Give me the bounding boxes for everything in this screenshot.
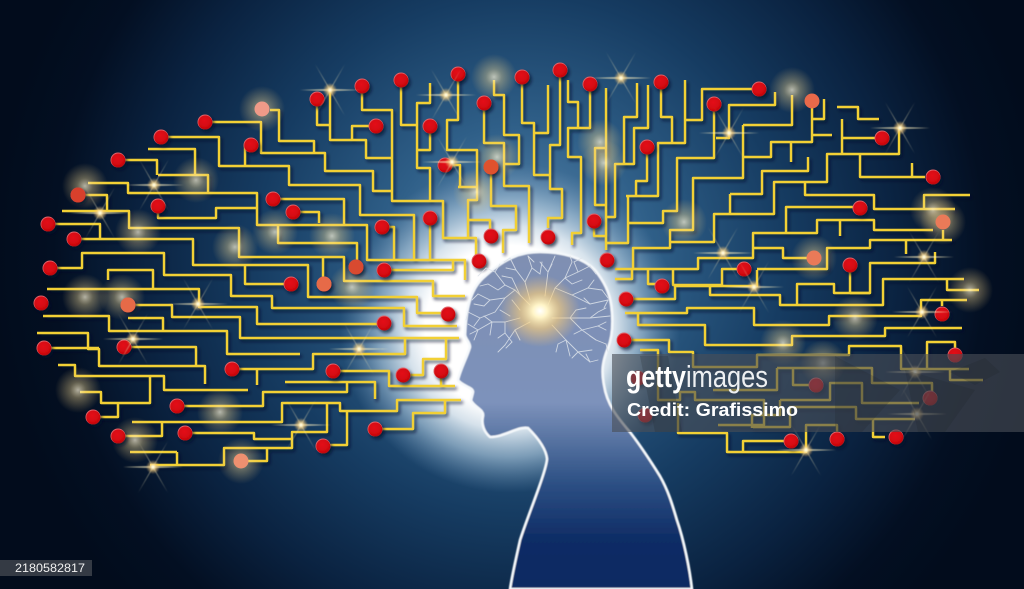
- brain core glow: [500, 275, 580, 347]
- circuit traces: [37, 70, 983, 465]
- sparkle stars: [70, 52, 954, 493]
- image id tag: [0, 560, 92, 576]
- brain neural branches: [466, 256, 610, 362]
- watermark band: Credit: Grafissimo: [627, 399, 798, 420]
- glow lights: [55, 54, 993, 484]
- watermark band: images: [686, 359, 768, 394]
- watermark band: [612, 354, 1024, 432]
- head silhouette: [458, 252, 692, 589]
- red node dots: [34, 62, 962, 454]
- watermark band: getty: [626, 359, 687, 394]
- pale glowing dots: [70, 94, 950, 468]
- image id tag: 2180582817: [15, 561, 85, 575]
